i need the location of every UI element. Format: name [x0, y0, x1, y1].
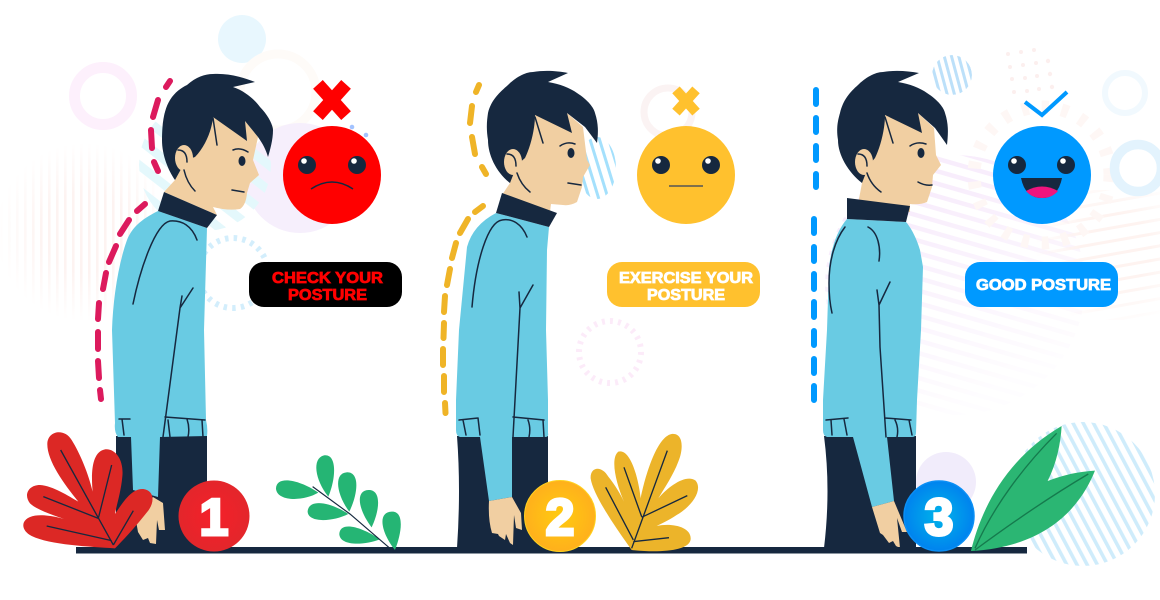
label: exercise your posture: POSTURE [647, 287, 725, 304]
trousers 1 [116, 436, 207, 548]
number badge 2 [524, 480, 596, 552]
line details 1 [119, 118, 248, 437]
face and neck 2 [502, 110, 590, 212]
ground line [76, 547, 1027, 554]
ear 1 [175, 145, 193, 171]
hair 1 [162, 74, 273, 180]
plant: red leaves [23, 432, 153, 548]
plant: big green leaves [971, 426, 1095, 551]
icon: blue check mark [1025, 92, 1067, 115]
label: good posture [965, 262, 1118, 307]
torso and sleeve 3 [823, 219, 923, 507]
number badge 3: 3 [925, 489, 953, 547]
spine guide: curved posture 1 [98, 81, 170, 399]
ear 2 [504, 149, 522, 175]
hand 1 [135, 497, 165, 544]
spine guide: curved posture 2 [443, 85, 486, 413]
face and neck 1 [164, 110, 259, 215]
eye 3 [918, 148, 924, 158]
collar 2 [496, 193, 557, 227]
torso and sleeve 1 [112, 211, 207, 497]
plant: yellow leaves [591, 434, 698, 551]
label: good posture: GOOD POSTURE [976, 277, 1111, 294]
emoji: happy face [993, 126, 1091, 224]
number badge 1: 1 [200, 489, 228, 547]
label: check your posture: POSTURE [288, 287, 367, 304]
ear 3 [855, 149, 873, 175]
plant: green sprig [276, 455, 401, 553]
number badge 2: 2 [546, 489, 574, 547]
hand 2 [489, 497, 522, 545]
icon: red cross [313, 80, 351, 120]
line details 3 [826, 117, 932, 437]
figure 2: slightly forward person [456, 71, 598, 548]
torso and sleeve 2 [456, 213, 549, 501]
eye 2 [568, 148, 574, 158]
number badge 3 [904, 481, 974, 551]
line details 2 [459, 117, 581, 437]
number badge 1 [178, 480, 250, 552]
collar 3 [847, 198, 910, 222]
face and neck 3 [858, 110, 941, 212]
emoji: neutral face [637, 126, 735, 224]
label: check your posture [249, 262, 402, 307]
trousers 3 [824, 436, 916, 548]
hair 2 [487, 71, 598, 183]
figure 3: upright person [823, 71, 948, 548]
hair 3 [837, 71, 948, 183]
hand 3 [872, 501, 907, 548]
label: exercise your posture: EXERCISE YOUR [619, 270, 753, 287]
collar 1 [158, 192, 217, 228]
icon: yellow cross [672, 87, 700, 115]
label: exercise your posture [607, 262, 760, 307]
eye 1 [238, 156, 246, 166]
emoji: sad face [283, 126, 381, 224]
label: check your posture: CHECK YOUR [272, 270, 383, 287]
figure 1: slouching person [112, 74, 273, 548]
dots near sad face [350, 125, 368, 137]
spine guide: straight posture 3 [814, 90, 816, 400]
trousers 2 [457, 436, 548, 548]
